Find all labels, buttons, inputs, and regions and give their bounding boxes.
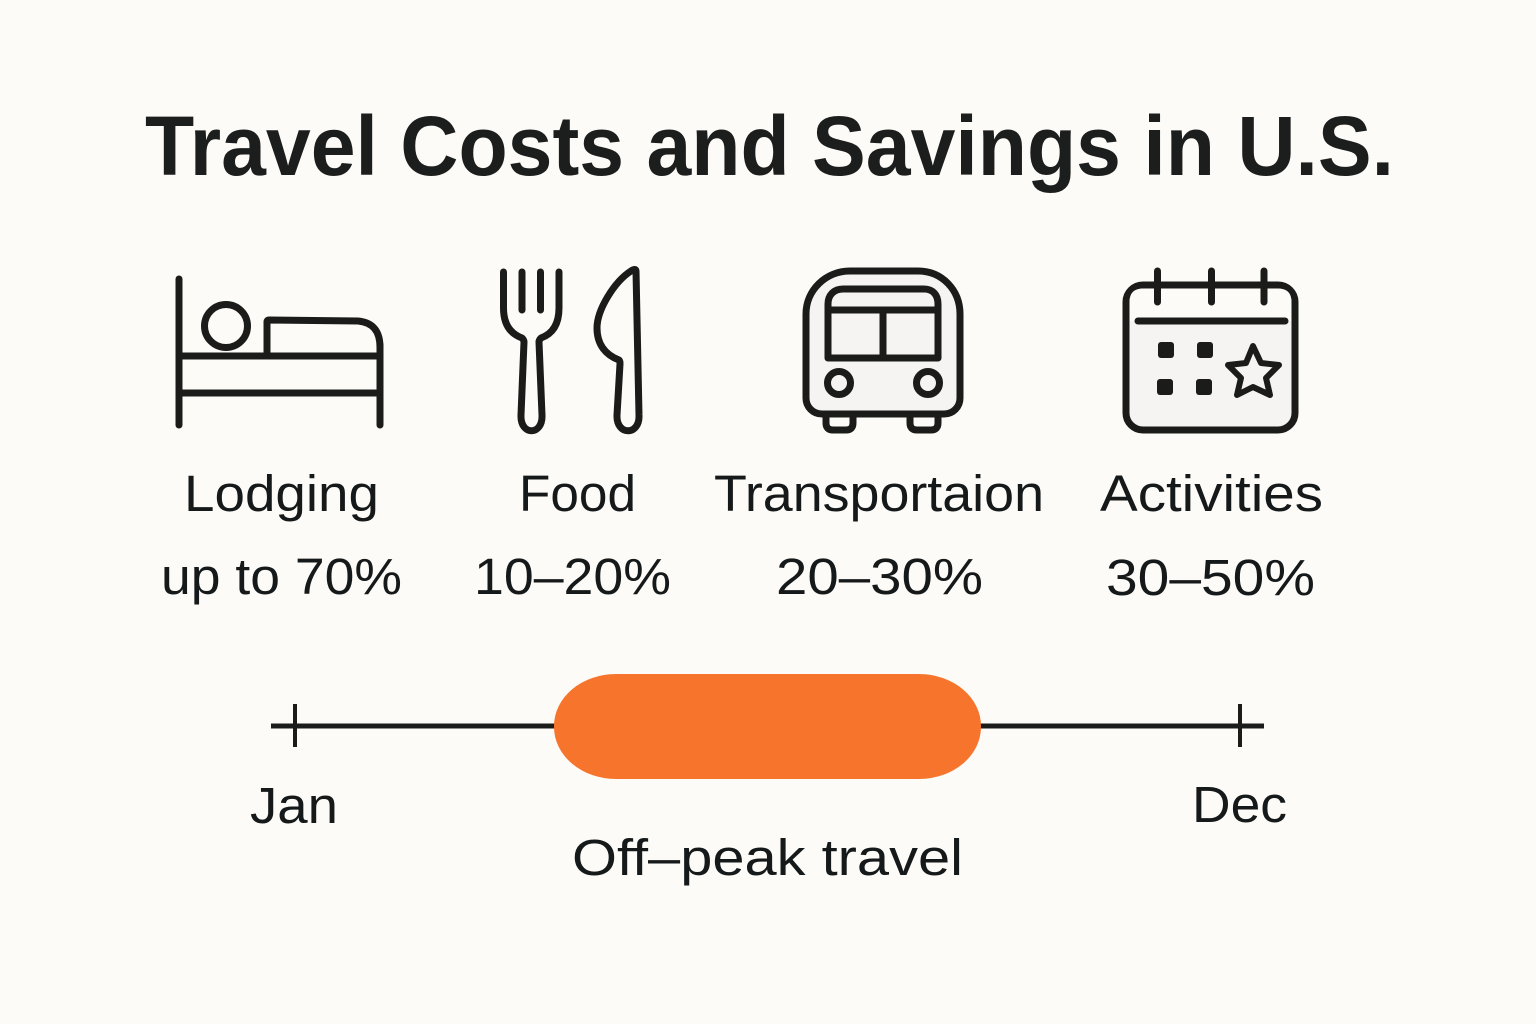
label: transportation: Transportaion xyxy=(714,465,1044,522)
off-peak highlight bar xyxy=(554,674,981,779)
value: food savings: 10–20% xyxy=(474,548,671,605)
label: off-peak travel: Off–peak travel xyxy=(572,829,963,886)
title: Travel Costs and Savings in U.S. xyxy=(145,99,1394,193)
value: lodging savings: up to 70% xyxy=(161,548,402,605)
value: transportation savings: 20–30% xyxy=(776,548,983,605)
icon: fork xyxy=(504,272,559,431)
icon: bed xyxy=(179,279,380,425)
label: dec: Dec xyxy=(1192,776,1287,833)
label: activities: Activities xyxy=(1100,465,1323,522)
icon: calendar with star xyxy=(1126,271,1295,430)
value: activities savings: 30–50% xyxy=(1106,549,1315,606)
label: food: Food xyxy=(519,465,636,522)
label: lodging: Lodging xyxy=(184,465,379,522)
label: jan: Jan xyxy=(250,777,338,834)
timeline axis xyxy=(271,704,1264,747)
icon: knife xyxy=(597,270,639,431)
icon: bus xyxy=(806,271,960,430)
